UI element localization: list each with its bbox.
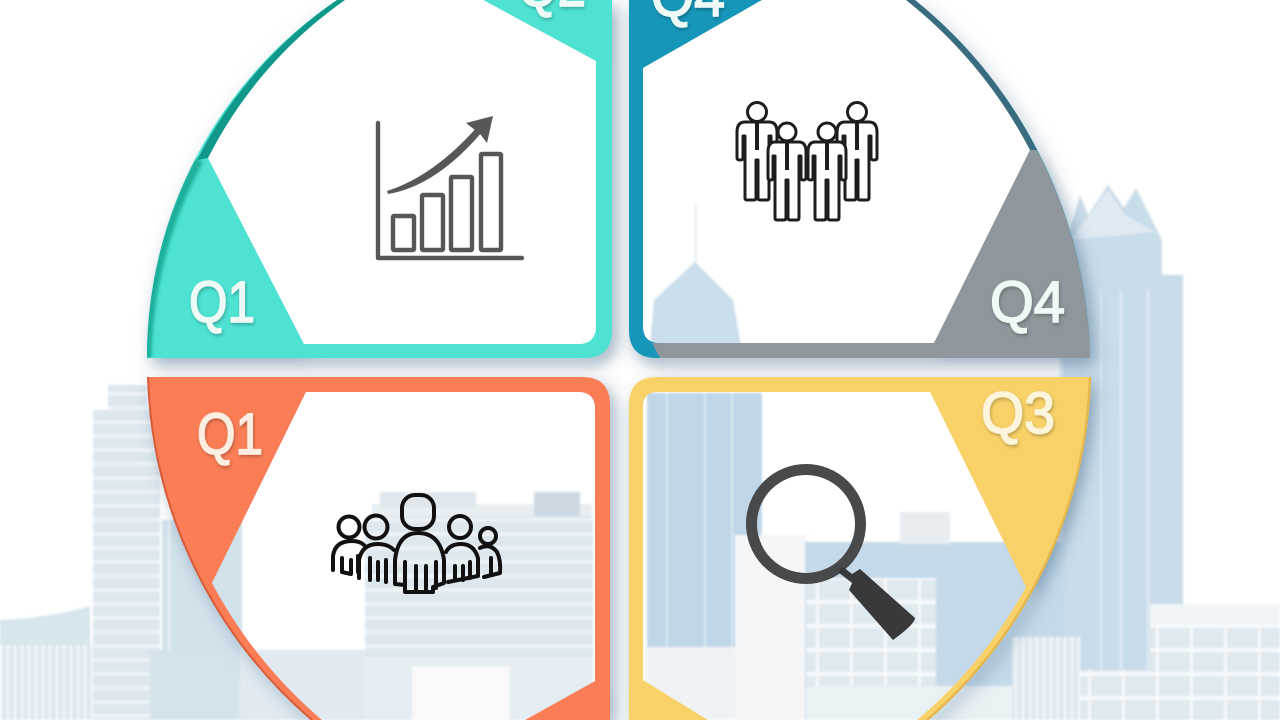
dark arc edge [906,0,1037,150]
label Q3: Q3 [981,381,1055,446]
darker teal outer edge [147,160,590,358]
yellow frame [629,377,1090,720]
right bottom buildings [1012,604,1280,720]
icon: group of people [333,495,500,592]
person far right [837,102,877,200]
dark teal arc edge [197,0,345,160]
label Q1: Q1 [197,402,263,467]
centre-left buildings seen through the orange panel [240,492,593,720]
person centre right [808,123,846,220]
icon: team of four in suits [737,102,877,220]
panel: Q3 research (yellow) [629,377,1090,720]
darker yellow arc edge [927,377,1090,720]
panel: Q1 people (orange) [148,377,610,720]
dark orange arc edge [148,377,312,720]
teal frame [147,0,612,358]
right skyscraper with crown [1060,185,1183,670]
label Q1: Q1 [189,270,255,335]
tower seen through the Q4 panel [650,205,741,346]
icon: magnifying glass [752,470,915,640]
left skyline: hill and low buildings [0,385,330,720]
grey corner and bottom strip [652,150,1090,358]
person centre left [768,123,806,220]
panel: Q4 team (blue and grey) [629,0,1090,358]
person far left [737,102,777,200]
label Q4 bottom: Q4 [990,270,1065,335]
icon: rising bar chart [378,116,522,258]
blue frame [629,0,1090,358]
panel: Q1/Q2 growth (teal) [147,0,612,358]
orange frame [148,377,610,720]
tall building and blocks seen through the Q3 panel [645,393,1065,720]
background: city skyline [0,185,1280,720]
